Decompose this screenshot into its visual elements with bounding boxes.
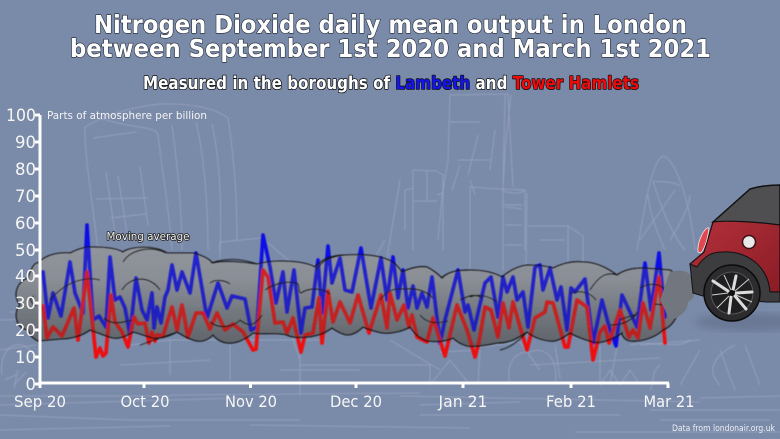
line: Lambeth (blue) (43, 225, 665, 346)
smoke cloud: moving average (16, 247, 678, 346)
title (70, 10, 711, 63)
line: Tower Hamlets (red) (43, 270, 665, 360)
y axis tick labels: 0 (26, 375, 36, 394)
wheel (704, 265, 760, 321)
y axis tick labels: 30 (15, 294, 36, 313)
smoke cloud overlay and outline (16, 247, 678, 350)
y axis tick labels: 40 (15, 267, 36, 286)
car window (713, 185, 780, 225)
sketch: gherkin tower (637, 156, 695, 250)
y axis tick labels: 70 (15, 187, 36, 206)
x axis month labels: Jan 21 (438, 392, 488, 411)
x axis line and ticks (39, 383, 669, 388)
car body (690, 221, 780, 292)
x axis (14, 383, 694, 411)
sketch: low-rise buildings (0, 180, 700, 395)
y axis tick labels: 10 (15, 348, 36, 367)
label: moving average: Moving average (106, 231, 190, 243)
x axis month labels: Feb 21 (546, 392, 596, 411)
y axis tick labels: 80 (15, 160, 36, 179)
sketch: central tower (405, 94, 583, 270)
car bumper and wheel arch (690, 252, 780, 302)
sketch: walkie talkie building (85, 104, 237, 265)
smoke inner scallops (30, 249, 674, 350)
subtitle: Measured in the boroughs of Lambeth and Tower Hamlets (143, 74, 639, 94)
tyre (704, 265, 760, 321)
sketch: trees (2, 340, 760, 390)
sketch: foreground ground lines (0, 393, 780, 432)
x axis month labels: Mar 21 (644, 392, 694, 411)
tail light (698, 228, 709, 253)
car shadow (695, 313, 780, 331)
fuel cap (742, 236, 756, 248)
y axis tick labels: 50 (15, 241, 36, 260)
x axis month labels: Sep 20 (14, 392, 66, 411)
x axis month labels: Oct 20 (120, 392, 170, 411)
illustration: car and exhaust (660, 185, 780, 331)
x axis month labels: Nov 20 (225, 392, 277, 411)
smoke translucent overlay (16, 247, 678, 346)
y axis tick labels: 100 (6, 106, 36, 125)
title: Nitrogen Dioxide daily mean output in London (94, 10, 687, 39)
y axis line and ticks (35, 115, 40, 385)
x axis month labels: Dec 20 (330, 392, 382, 411)
spokes (713, 276, 752, 313)
y axis tick labels (6, 106, 36, 394)
hub (729, 290, 735, 296)
line chart (43, 225, 665, 360)
y axis tick labels: 20 (15, 321, 36, 340)
y axis tick labels: 90 (15, 133, 36, 152)
x axis month labels (14, 392, 694, 411)
y axis (6, 106, 40, 394)
background sketch: London skyline (0, 94, 780, 432)
exhaust puff (660, 271, 695, 320)
y axis caption: Parts of atmosphere per billion (47, 109, 207, 122)
title: between September 1st 2020 and March 1st 2021 (70, 34, 711, 63)
smoke cloud body (16, 247, 678, 346)
y axis tick labels: 60 (15, 214, 36, 233)
rim (711, 272, 753, 314)
